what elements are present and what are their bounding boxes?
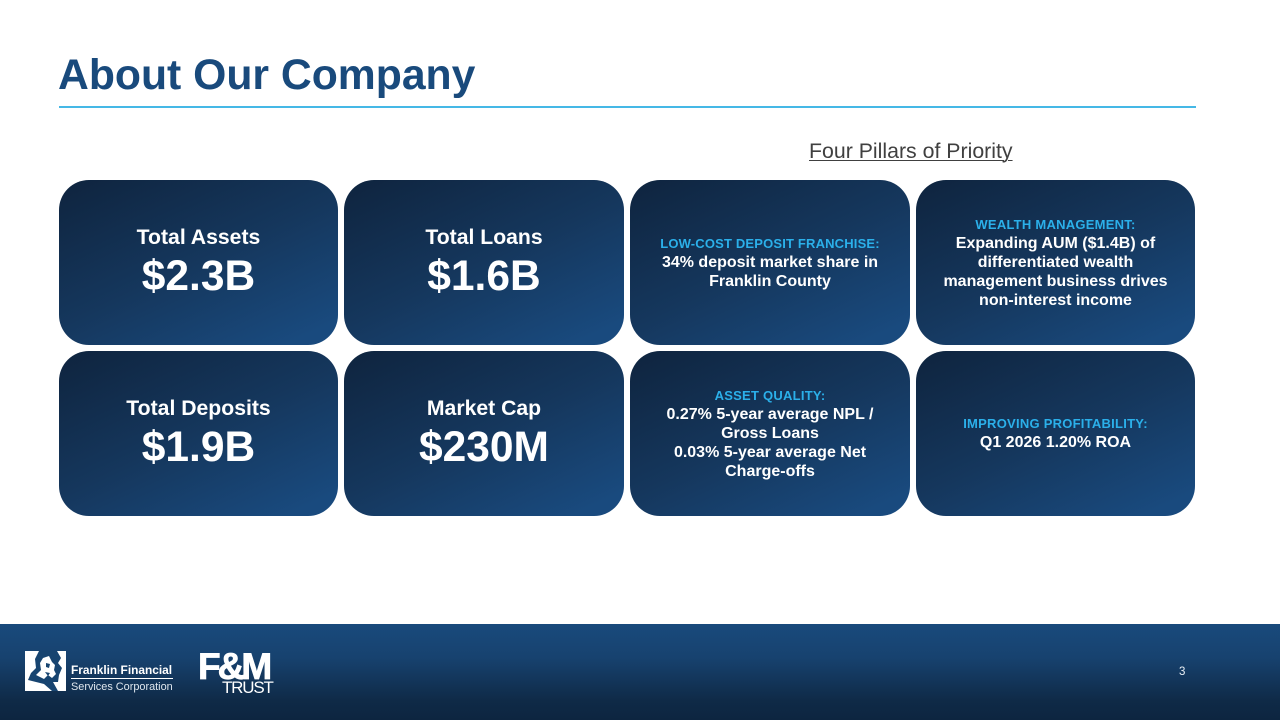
logo: Franklin Financial: Services Corporation (71, 681, 173, 693)
panel: improving profitability: Q1 2026 1.20% ROA (980, 434, 1131, 451)
logo: Franklin Financial: Franklin Financial (71, 663, 172, 677)
panel: low-cost deposit franchise: LOW-COST DEPOSIT FRANCHISE: (660, 236, 880, 251)
panel: wealth management (916, 180, 1195, 345)
panel: total deposits: $1.9B (142, 424, 255, 471)
panel: asset quality: Gross Loans (721, 425, 819, 442)
panel: total deposits: Total Deposits (126, 397, 271, 420)
panel: asset quality: 0.27% 5-year average NPL / (667, 406, 873, 423)
panel: total loans: $1.6B (427, 253, 541, 300)
panel: market cap: Market Cap (427, 397, 541, 420)
panel: low-cost deposit franchise: 34% deposit market share in (662, 254, 878, 271)
panel: asset quality: ASSET QUALITY: (715, 388, 825, 403)
logo: F&M Trust: F&M (198, 646, 269, 687)
logo: Franklin Financial (25, 651, 173, 693)
panel: market cap: $230M (419, 424, 549, 471)
panel: asset quality: Charge-offs (725, 463, 815, 480)
panel: total assets (59, 180, 338, 345)
panel: low-cost deposit franchise: Franklin County (709, 273, 831, 290)
panel: total deposits (59, 351, 338, 516)
panel: wealth management: management business drives (943, 273, 1168, 290)
panel: total loans (344, 180, 624, 345)
panel: wealth management: Expanding AUM ($1.4B) of (956, 235, 1155, 252)
footer band (0, 624, 1280, 720)
panel: improving profitability (916, 351, 1195, 516)
panel: asset quality: 0.03% 5-year average Net (674, 444, 866, 461)
panel: improving profitability: IMPROVING PROFITABILITY: (963, 416, 1148, 431)
panel: total assets: $2.3B (142, 253, 255, 300)
panel: wealth management: WEALTH MANAGEMENT: (975, 217, 1136, 232)
panel: market cap (344, 351, 624, 516)
panel: wealth management: non-interest income (979, 292, 1132, 309)
panel: total loans: Total Loans (425, 226, 543, 249)
heading: four pillars: Four Pillars of Priority (809, 139, 1013, 163)
title: About Our Company (58, 51, 475, 99)
panel: low-cost deposit franchise (630, 180, 910, 345)
panel: asset quality (630, 351, 910, 516)
panel: total assets: Total Assets (137, 226, 260, 249)
page number: 3 (1179, 666, 1185, 678)
panel: wealth management: differentiated wealth (978, 254, 1133, 271)
logo: F&M Trust: TRUST (222, 678, 273, 697)
icon: lion mark (25, 651, 66, 691)
